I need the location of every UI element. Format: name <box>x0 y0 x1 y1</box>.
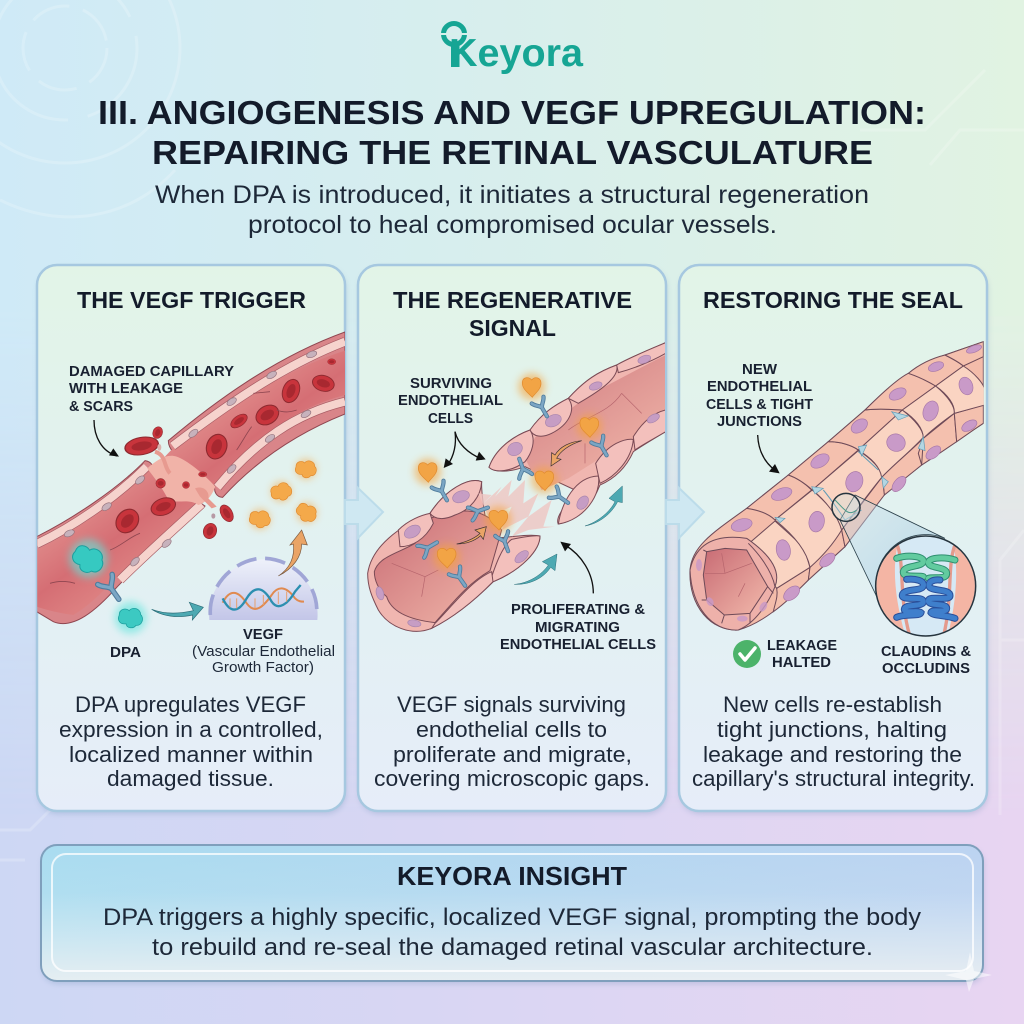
label: leakage halted: HALTED <box>772 655 831 671</box>
label: VEGF: (Vascular Endothelial <box>192 644 335 660</box>
body text <box>692 692 975 791</box>
subtitle: protocol to heal compromised ocular vessels. <box>248 211 777 239</box>
heading: restoring the seal: RESTORING THE SEAL <box>703 287 963 313</box>
body text: capillary's structural integrity. <box>692 766 975 791</box>
body text <box>59 692 323 791</box>
label: leakage halted: LEAKAGE <box>767 638 837 654</box>
illustration: damaged capillary <box>37 332 345 624</box>
panel: the regenerative signal <box>358 265 667 814</box>
label: new endothelial cells <box>706 362 813 430</box>
title: REPAIRING THE RETINAL VASCULATURE <box>152 134 873 171</box>
body text: localized manner within <box>69 742 313 767</box>
body text: DPA upregulates VEGF <box>75 692 306 717</box>
label: new endothelial cells: CELLS & TIGHT <box>706 397 813 413</box>
panel: the VEGF trigger <box>37 265 346 814</box>
label: VEGF: Growth Factor) <box>212 660 314 676</box>
body text: tight junctions, halting <box>717 717 947 742</box>
magnifier: claudins and occludins <box>832 493 977 640</box>
illustration: regenerating capillary <box>368 343 666 631</box>
logo: Keyora: Keyora <box>449 32 583 75</box>
label: damaged capillary: WITH LEAKAGE <box>69 381 183 397</box>
subtitle: When DPA is introduced, it initiates a structural regeneration <box>155 181 869 209</box>
label: VEGF: VEGF <box>243 627 283 643</box>
title <box>98 94 926 171</box>
title: III. ANGIOGENESIS AND VEGF UPREGULATION: <box>98 94 926 131</box>
heading: the VEGF trigger: THE VEGF TRIGGER <box>77 287 306 313</box>
label: claudins and occludins <box>881 644 972 677</box>
label: surviving endothelial cells: CELLS <box>428 411 473 427</box>
insight text: to rebuild and re-seal the damaged retinal vascular architecture. <box>152 934 873 961</box>
label: damaged capillary <box>69 364 234 415</box>
body text: expression in a controlled, <box>59 717 323 742</box>
subtitle <box>155 181 869 239</box>
body text: damaged tissue. <box>107 766 274 791</box>
label: claudins and occludins: CLAUDINS & <box>881 644 972 660</box>
heading: the regenerative signal: THE REGENERATIVE <box>393 287 632 313</box>
label: damaged capillary: & SCARS <box>69 399 133 415</box>
heading: the regenerative signal <box>393 287 632 341</box>
body text: proliferate and migrate, <box>393 742 632 767</box>
illustration: sealed capillary <box>690 342 985 630</box>
icon: check mark <box>733 640 761 668</box>
insight text: DPA triggers a highly specific, localized VEGF signal, prompting the body <box>103 904 921 931</box>
label: proliferating cells: MIGRATING <box>535 620 620 636</box>
illustration: DPA binding and VEGF expression <box>69 459 319 634</box>
label: surviving endothelial cells: ENDOTHELIAL <box>398 393 503 409</box>
body text <box>374 692 650 791</box>
arrow: panel 2 to panel 3 <box>666 488 704 538</box>
panel: Keyora insight <box>41 845 992 992</box>
body text: covering microscopic gaps. <box>374 766 650 791</box>
panel: restoring the seal <box>679 265 988 814</box>
arrow: new cells <box>758 435 780 473</box>
body text: leakage and restoring the <box>703 742 962 767</box>
label: proliferating cells: PROLIFERATING & <box>511 602 646 618</box>
heading: Keyora insight: KEYORA INSIGHT <box>397 861 627 891</box>
heading: the regenerative signal: SIGNAL <box>469 315 556 341</box>
label: new endothelial cells: ENDOTHELIAL <box>707 379 812 395</box>
label: leakage halted <box>767 638 837 671</box>
label: proliferating cells: ENDOTHELIAL CELLS <box>500 637 656 653</box>
label: claudins and occludins: OCCLUDINS <box>882 661 970 677</box>
insight text <box>103 904 921 961</box>
body text: VEGF signals surviving <box>397 692 626 717</box>
body text: endothelial cells to <box>416 717 607 742</box>
label: surviving endothelial cells: SURVIVING <box>410 376 492 392</box>
label: VEGF <box>192 627 335 676</box>
label: damaged capillary: DAMAGED CAPILLARY <box>69 364 234 380</box>
body text: New cells re-establish <box>723 692 942 717</box>
arrow: panel 1 to panel 2 <box>345 488 383 538</box>
label: new endothelial cells: NEW <box>742 362 777 378</box>
label: surviving endothelial cells <box>398 376 503 427</box>
label: proliferating cells <box>500 602 656 653</box>
label: DPA: DPA <box>110 645 142 661</box>
label: new endothelial cells: JUNCTIONS <box>717 414 802 430</box>
